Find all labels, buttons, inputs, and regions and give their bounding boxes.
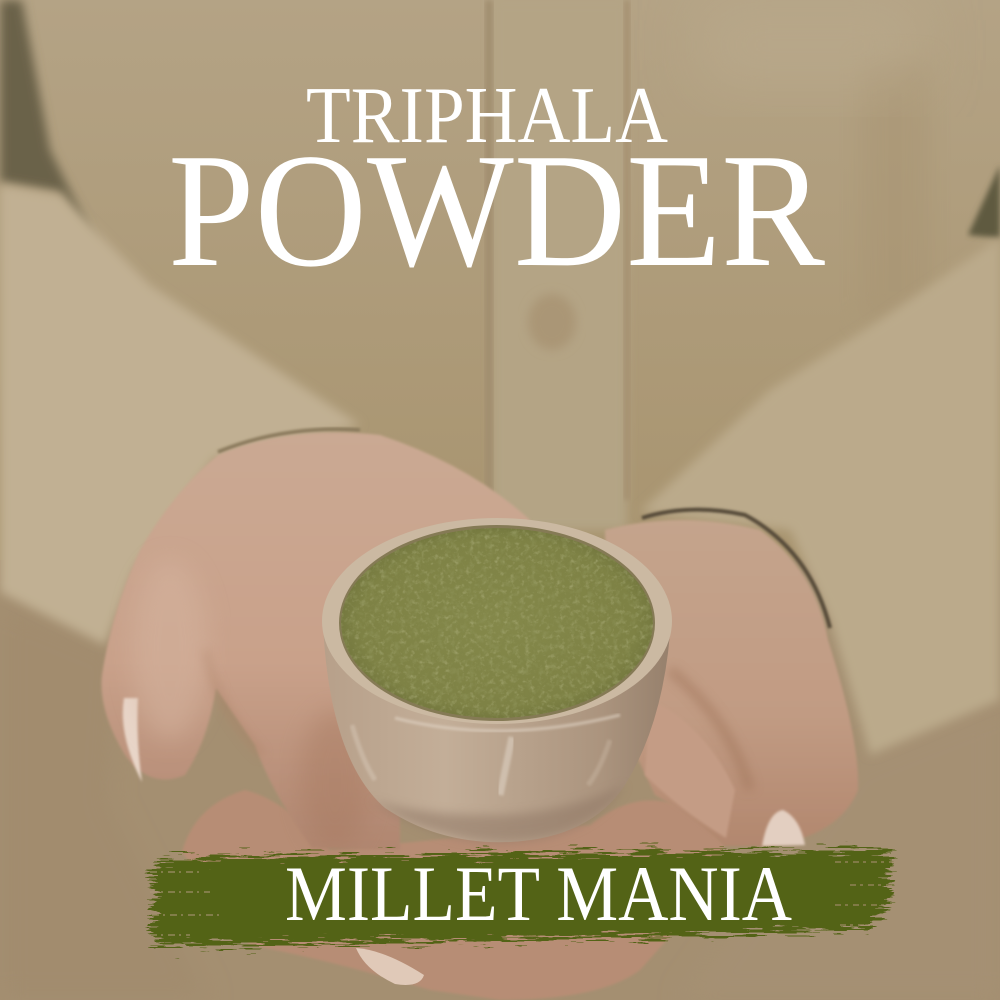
- left sleeve: [0, 185, 360, 645]
- cuffs: [218, 429, 830, 628]
- right hand: [605, 520, 858, 846]
- brand name: MILLET MANIA: [285, 850, 792, 937]
- right sleeve: [640, 238, 1000, 755]
- green powder: [340, 525, 654, 721]
- green brush banner: [150, 850, 895, 946]
- bowl: [322, 518, 672, 842]
- title: Powder: POWDER: [168, 121, 825, 301]
- lower fingers: [182, 790, 725, 1000]
- left hand: [101, 432, 530, 850]
- title: Triphala: TRIPHALA: [306, 72, 668, 160]
